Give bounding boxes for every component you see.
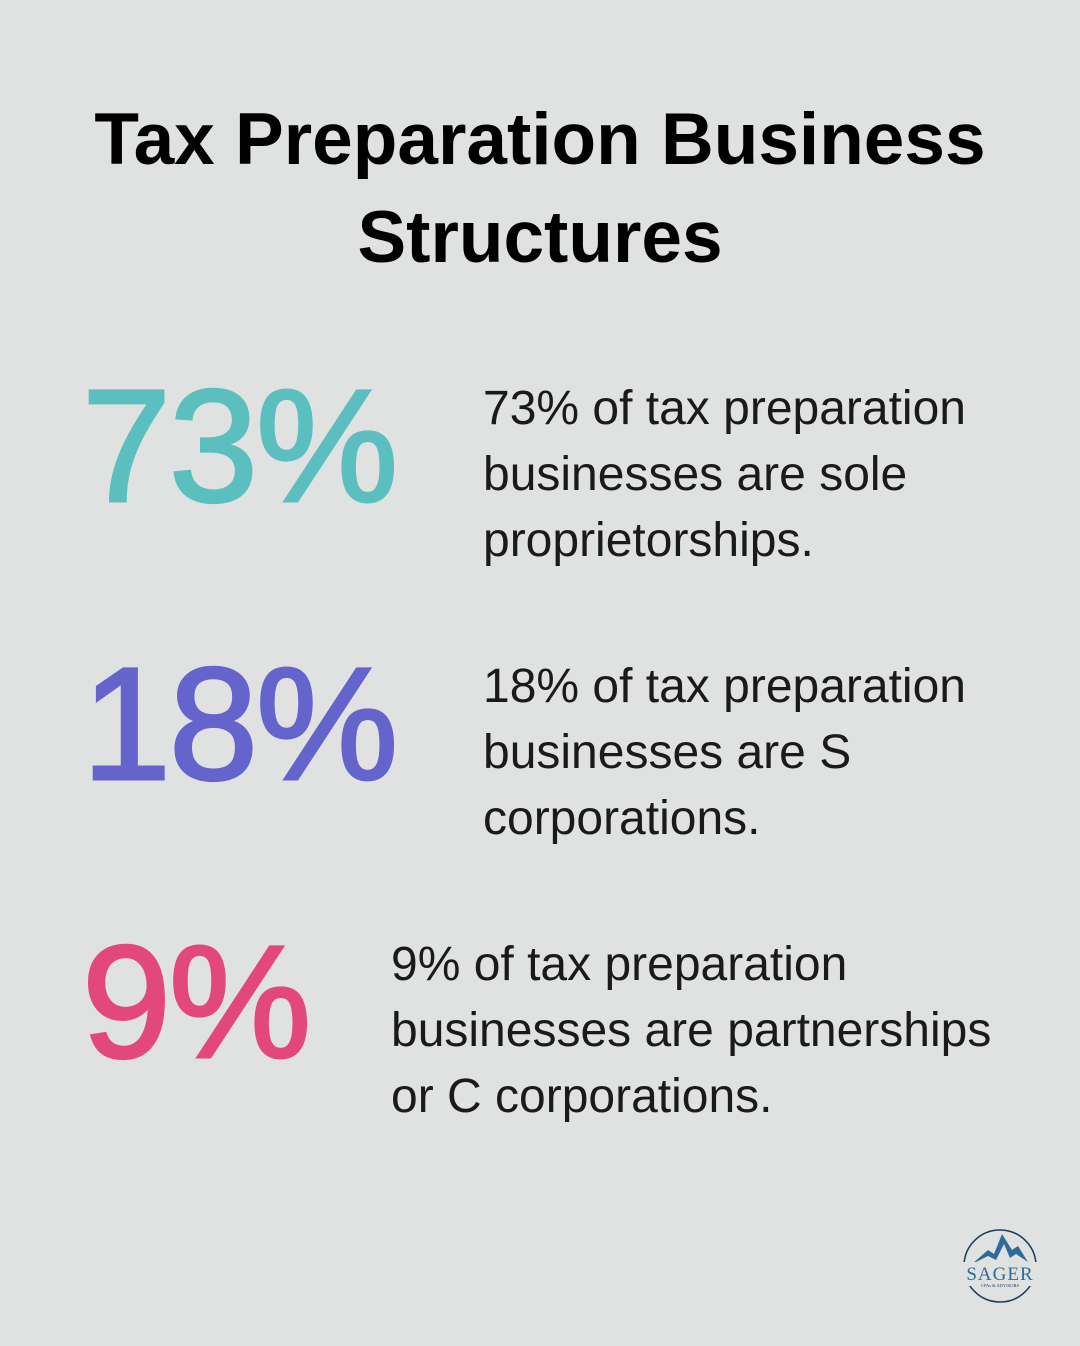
logo: CPAs & ADVISORS: [981, 1283, 1020, 1288]
text: 18%: businesses are S: [483, 726, 851, 779]
text: 73%: [483, 382, 966, 567]
text: 18%: 18% of tax preparation: [483, 660, 966, 713]
logo: [964, 1229, 1036, 1303]
text: 9%: or C corporations.: [391, 1070, 772, 1123]
text: 9%: businesses are partnerships: [391, 1004, 991, 1057]
text: 9%: 9% of tax preparation: [391, 938, 847, 991]
logo: SAGER: [966, 1264, 1034, 1285]
text: 73%: businesses are sole: [483, 448, 907, 501]
text: 73%: proprietorships.: [483, 514, 814, 567]
stat: 73%: 73%: [82, 356, 396, 535]
text: 18%: [483, 660, 966, 845]
text: 9%: [391, 938, 991, 1123]
title: [94, 99, 986, 278]
stat: 9%: 9%: [82, 912, 309, 1091]
text: 18%: corporations.: [483, 792, 760, 845]
stat: 18%: 18%: [82, 634, 396, 813]
title: Tax Preparation Business: [94, 99, 986, 180]
title: Structures: [357, 197, 723, 278]
text: 73%: 73% of tax preparation: [483, 382, 966, 435]
